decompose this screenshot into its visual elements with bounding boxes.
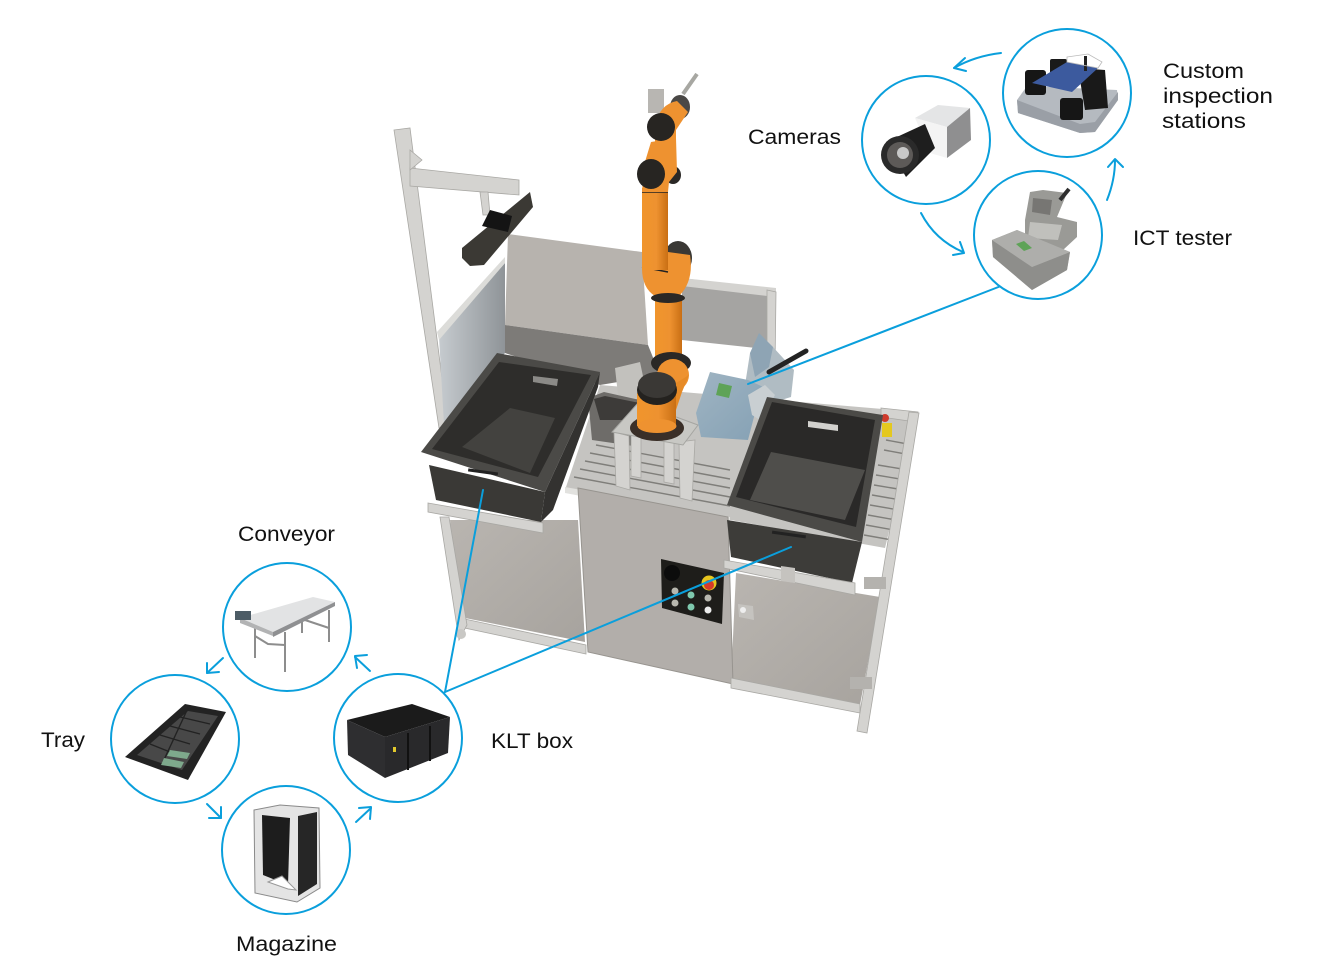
arrow: cameras to ICT [921, 213, 964, 255]
left leg post [440, 517, 467, 640]
icon: industrial camera [881, 105, 971, 177]
elbow joint [642, 241, 692, 303]
upper arm link [642, 188, 668, 270]
leader line: ICT tester to machine [748, 286, 1001, 384]
shoulder joint [637, 352, 691, 433]
base cap [637, 375, 677, 405]
leader line: KLT box to left bin [445, 490, 483, 692]
door latch [738, 604, 754, 620]
wrist segment [642, 138, 677, 192]
left bin rail [428, 503, 543, 533]
label: custom inspection stations: Custom [1163, 60, 1244, 83]
left side panel [439, 263, 505, 425]
control panel [661, 559, 724, 624]
icon: KLT crate [347, 704, 450, 778]
arrow: KLT to conveyor [355, 655, 370, 671]
station: ICT tester [974, 171, 1102, 299]
station: conveyor [223, 563, 351, 691]
icon: fixture plate [1017, 54, 1118, 133]
overhead camera bar [462, 192, 533, 266]
arrow: custom to cameras [954, 53, 1001, 71]
label: custom inspection stations: inspection [1163, 85, 1273, 108]
label: magazine: Magazine [236, 933, 337, 956]
leader line: KLT box to right bin [445, 547, 791, 692]
label: ICT tester: ICT tester [1133, 227, 1232, 250]
back panel [505, 234, 648, 345]
small center bin [588, 392, 640, 447]
robot arm [637, 74, 697, 433]
lower arm link [655, 298, 682, 364]
label: KLT box: KLT box [491, 730, 574, 753]
arrow: magazine to KLT [356, 807, 371, 822]
arrow: tray to magazine [207, 804, 221, 818]
camera crossbar [410, 168, 519, 195]
station: tray [111, 675, 239, 803]
tool and flange [648, 74, 697, 119]
station: magazine [222, 786, 350, 914]
robot pedestal [612, 403, 698, 501]
station: cameras [862, 76, 990, 204]
right KLT bin [727, 397, 883, 583]
label: conveyor: Conveyor [238, 523, 335, 546]
right bin rail [724, 560, 855, 595]
left upright post [394, 128, 448, 428]
left cabinet panel [450, 520, 585, 642]
workstation machine [394, 74, 919, 733]
wrist cap upper [647, 113, 675, 141]
label: tray: Tray [41, 729, 86, 752]
arrow: conveyor to tray [207, 658, 223, 673]
label: custom inspection stations [1162, 60, 1273, 133]
station: custom inspection [1003, 29, 1131, 157]
label: cameras: Cameras [748, 126, 841, 149]
small rear wrist cap [665, 166, 681, 184]
station: KLT box [334, 674, 462, 802]
table emergency button [881, 414, 892, 437]
lower back recess [505, 325, 660, 385]
icon: tester [992, 189, 1077, 290]
ICT tester unit [696, 333, 806, 440]
right cabinet panel [731, 573, 880, 705]
icon: PCB magazine rack [254, 805, 320, 902]
left KLT bin [421, 353, 600, 522]
label: custom inspection stations: stations [1162, 110, 1246, 133]
table top with slats [565, 385, 918, 548]
center cabinet panel [578, 488, 733, 684]
right back panel [682, 278, 776, 350]
lower rails [460, 618, 586, 654]
wrist cap lower [637, 159, 665, 189]
icon: conveyor belt [235, 597, 335, 672]
icon: PCB tray [125, 704, 226, 780]
top wrist segment [655, 101, 688, 146]
right post [857, 412, 919, 733]
hinges [864, 577, 886, 589]
gripper bracket glass [615, 362, 648, 400]
arrow: ICT to custom [1107, 159, 1123, 200]
